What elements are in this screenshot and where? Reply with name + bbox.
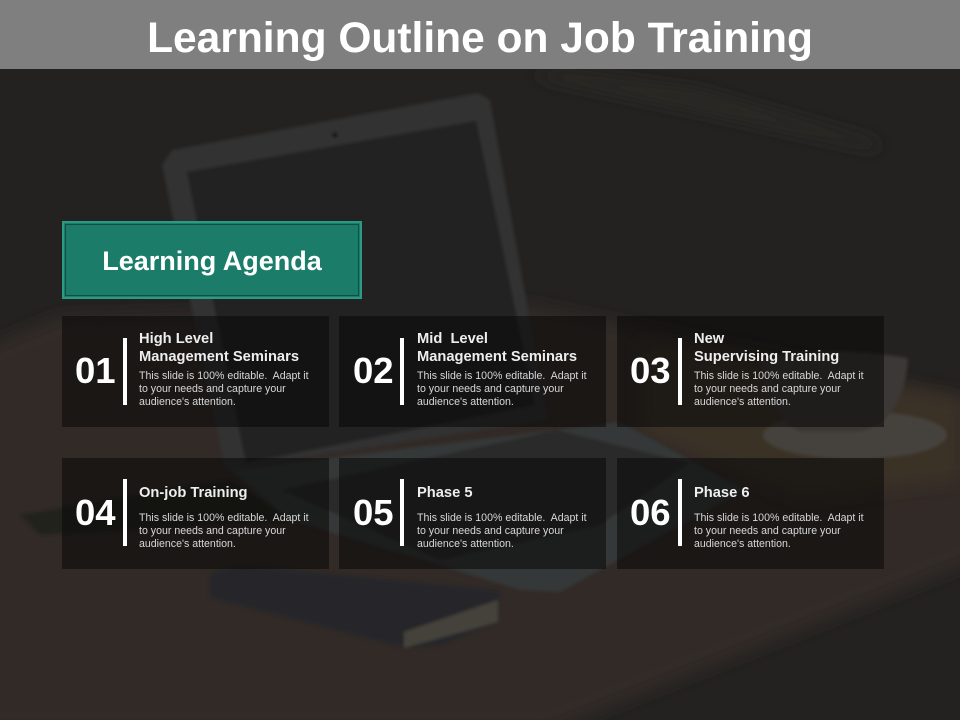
title bar bbox=[0, 0, 960, 69]
panel 01: 01 bbox=[75, 350, 116, 391]
panel 04: 04 bbox=[75, 492, 116, 533]
panel 04 bbox=[62, 458, 329, 569]
panel 03: This slide is 100% editable. Adapt it to your needs and capture your audience's attention. bbox=[694, 370, 864, 408]
panel 05: Phase 5 bbox=[417, 485, 473, 501]
heading box: Learning Agenda: Learning Agenda bbox=[102, 246, 322, 276]
notebook bbox=[210, 565, 500, 648]
panel 04: This slide is 100% editable. Adapt it to your needs and capture your audience's attention. bbox=[139, 512, 309, 550]
panel 06 bbox=[617, 458, 884, 569]
panel 03: 03 bbox=[630, 350, 671, 391]
panel 06: This slide is 100% editable. Adapt it to your needs and capture your audience's attention. bbox=[694, 512, 864, 550]
panel 03 bbox=[617, 316, 884, 427]
title bar: Learning Outline on Job Training bbox=[147, 15, 813, 62]
panel 02: This slide is 100% editable. Adapt it to your needs and capture your audience's attention. bbox=[417, 370, 587, 408]
panel 06: Phase 6 bbox=[694, 485, 750, 501]
panel 05: 05 bbox=[353, 492, 394, 533]
panel 05: This slide is 100% editable. Adapt it to your needs and capture your audience's attention. bbox=[417, 512, 587, 550]
panel 05 bbox=[339, 458, 606, 569]
panel 01: This slide is 100% editable. Adapt it to your needs and capture your audience's attention. bbox=[139, 370, 309, 408]
panel 04: On-job Training bbox=[139, 485, 248, 501]
panel 02: 02 bbox=[353, 350, 394, 391]
heading box: Learning Agenda bbox=[62, 221, 362, 299]
panel 06: 06 bbox=[630, 492, 671, 533]
coffee cup and saucer bbox=[763, 411, 947, 459]
panel 02: Mid Level Management Seminars bbox=[417, 331, 577, 365]
panel 01 bbox=[62, 316, 329, 427]
panel 01: High Level Management Seminars bbox=[139, 331, 299, 365]
laptop base bbox=[230, 422, 745, 592]
laptop screen bbox=[162, 93, 548, 470]
panel 03: New Supervising Training bbox=[694, 331, 839, 365]
panel 02 bbox=[339, 316, 606, 427]
